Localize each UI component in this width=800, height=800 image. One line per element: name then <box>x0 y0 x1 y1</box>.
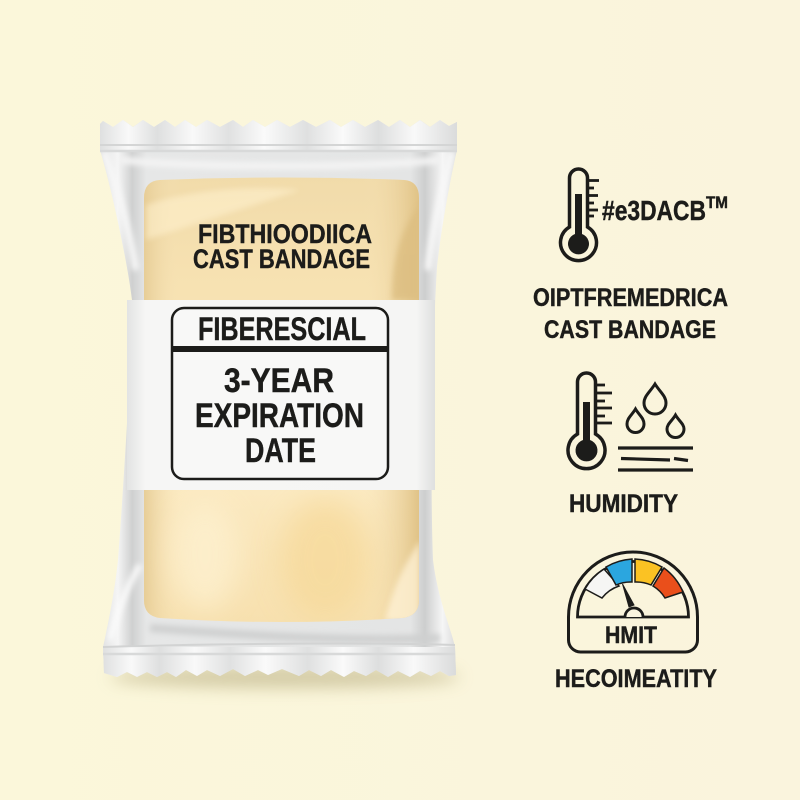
pouch body <box>100 120 457 677</box>
thermometer outline <box>560 169 596 261</box>
top seal strip <box>100 120 457 150</box>
thermometer code label: #e3DACB <box>602 195 706 226</box>
caption: cast bandage <box>533 284 728 344</box>
humidity lines <box>618 448 693 470</box>
thermometer fill <box>576 402 598 461</box>
caption: gauge: HECOIMEATITY <box>555 665 717 693</box>
label band <box>127 300 435 490</box>
label frame <box>172 308 388 479</box>
package title <box>193 219 372 274</box>
water drops <box>627 384 684 438</box>
expiration text: 3-YEAR <box>224 362 334 400</box>
thermometer ticks <box>596 385 612 423</box>
bottom seal strip <box>103 647 456 677</box>
gauge label: HMIT <box>605 622 657 649</box>
gauge needle <box>622 584 634 607</box>
icon: thermometer with code text <box>560 169 728 261</box>
expiration label <box>172 308 388 479</box>
thermometer fill <box>568 194 589 254</box>
gauge segments <box>585 559 683 598</box>
expiration text: DATE <box>245 432 316 470</box>
label divider <box>172 346 388 352</box>
label heading: FIBERESCIAL <box>198 311 366 347</box>
thermometer ticks <box>588 180 599 216</box>
caption: humidity: HUMIDITY <box>569 490 678 518</box>
package shadow <box>110 666 460 688</box>
package title: FIBTHIOODIICA <box>198 219 372 249</box>
gauge hub <box>625 608 643 617</box>
package title: CAST BANDAGE <box>193 244 370 274</box>
infographic canvas <box>100 120 728 697</box>
expiration text <box>195 362 364 470</box>
trademark mark: TM <box>706 193 728 212</box>
icon: humidity gauge <box>568 552 698 652</box>
product window <box>144 175 420 627</box>
caption: cast bandage: OIPTFREMEDRICA <box>533 284 728 312</box>
thermometer outline <box>568 373 605 469</box>
package: foil pouch <box>100 120 457 677</box>
bottom seal crease lines <box>103 644 455 654</box>
icon: thermometer and water drops <box>568 373 693 470</box>
expiration text: EXPIRATION <box>195 397 364 435</box>
gauge dial <box>578 562 688 617</box>
gauge housing <box>568 552 698 652</box>
caption: cast bandage: CAST BANDAGE <box>544 316 716 344</box>
pouch fold shading <box>104 152 452 640</box>
top seal crease lines <box>100 145 457 151</box>
